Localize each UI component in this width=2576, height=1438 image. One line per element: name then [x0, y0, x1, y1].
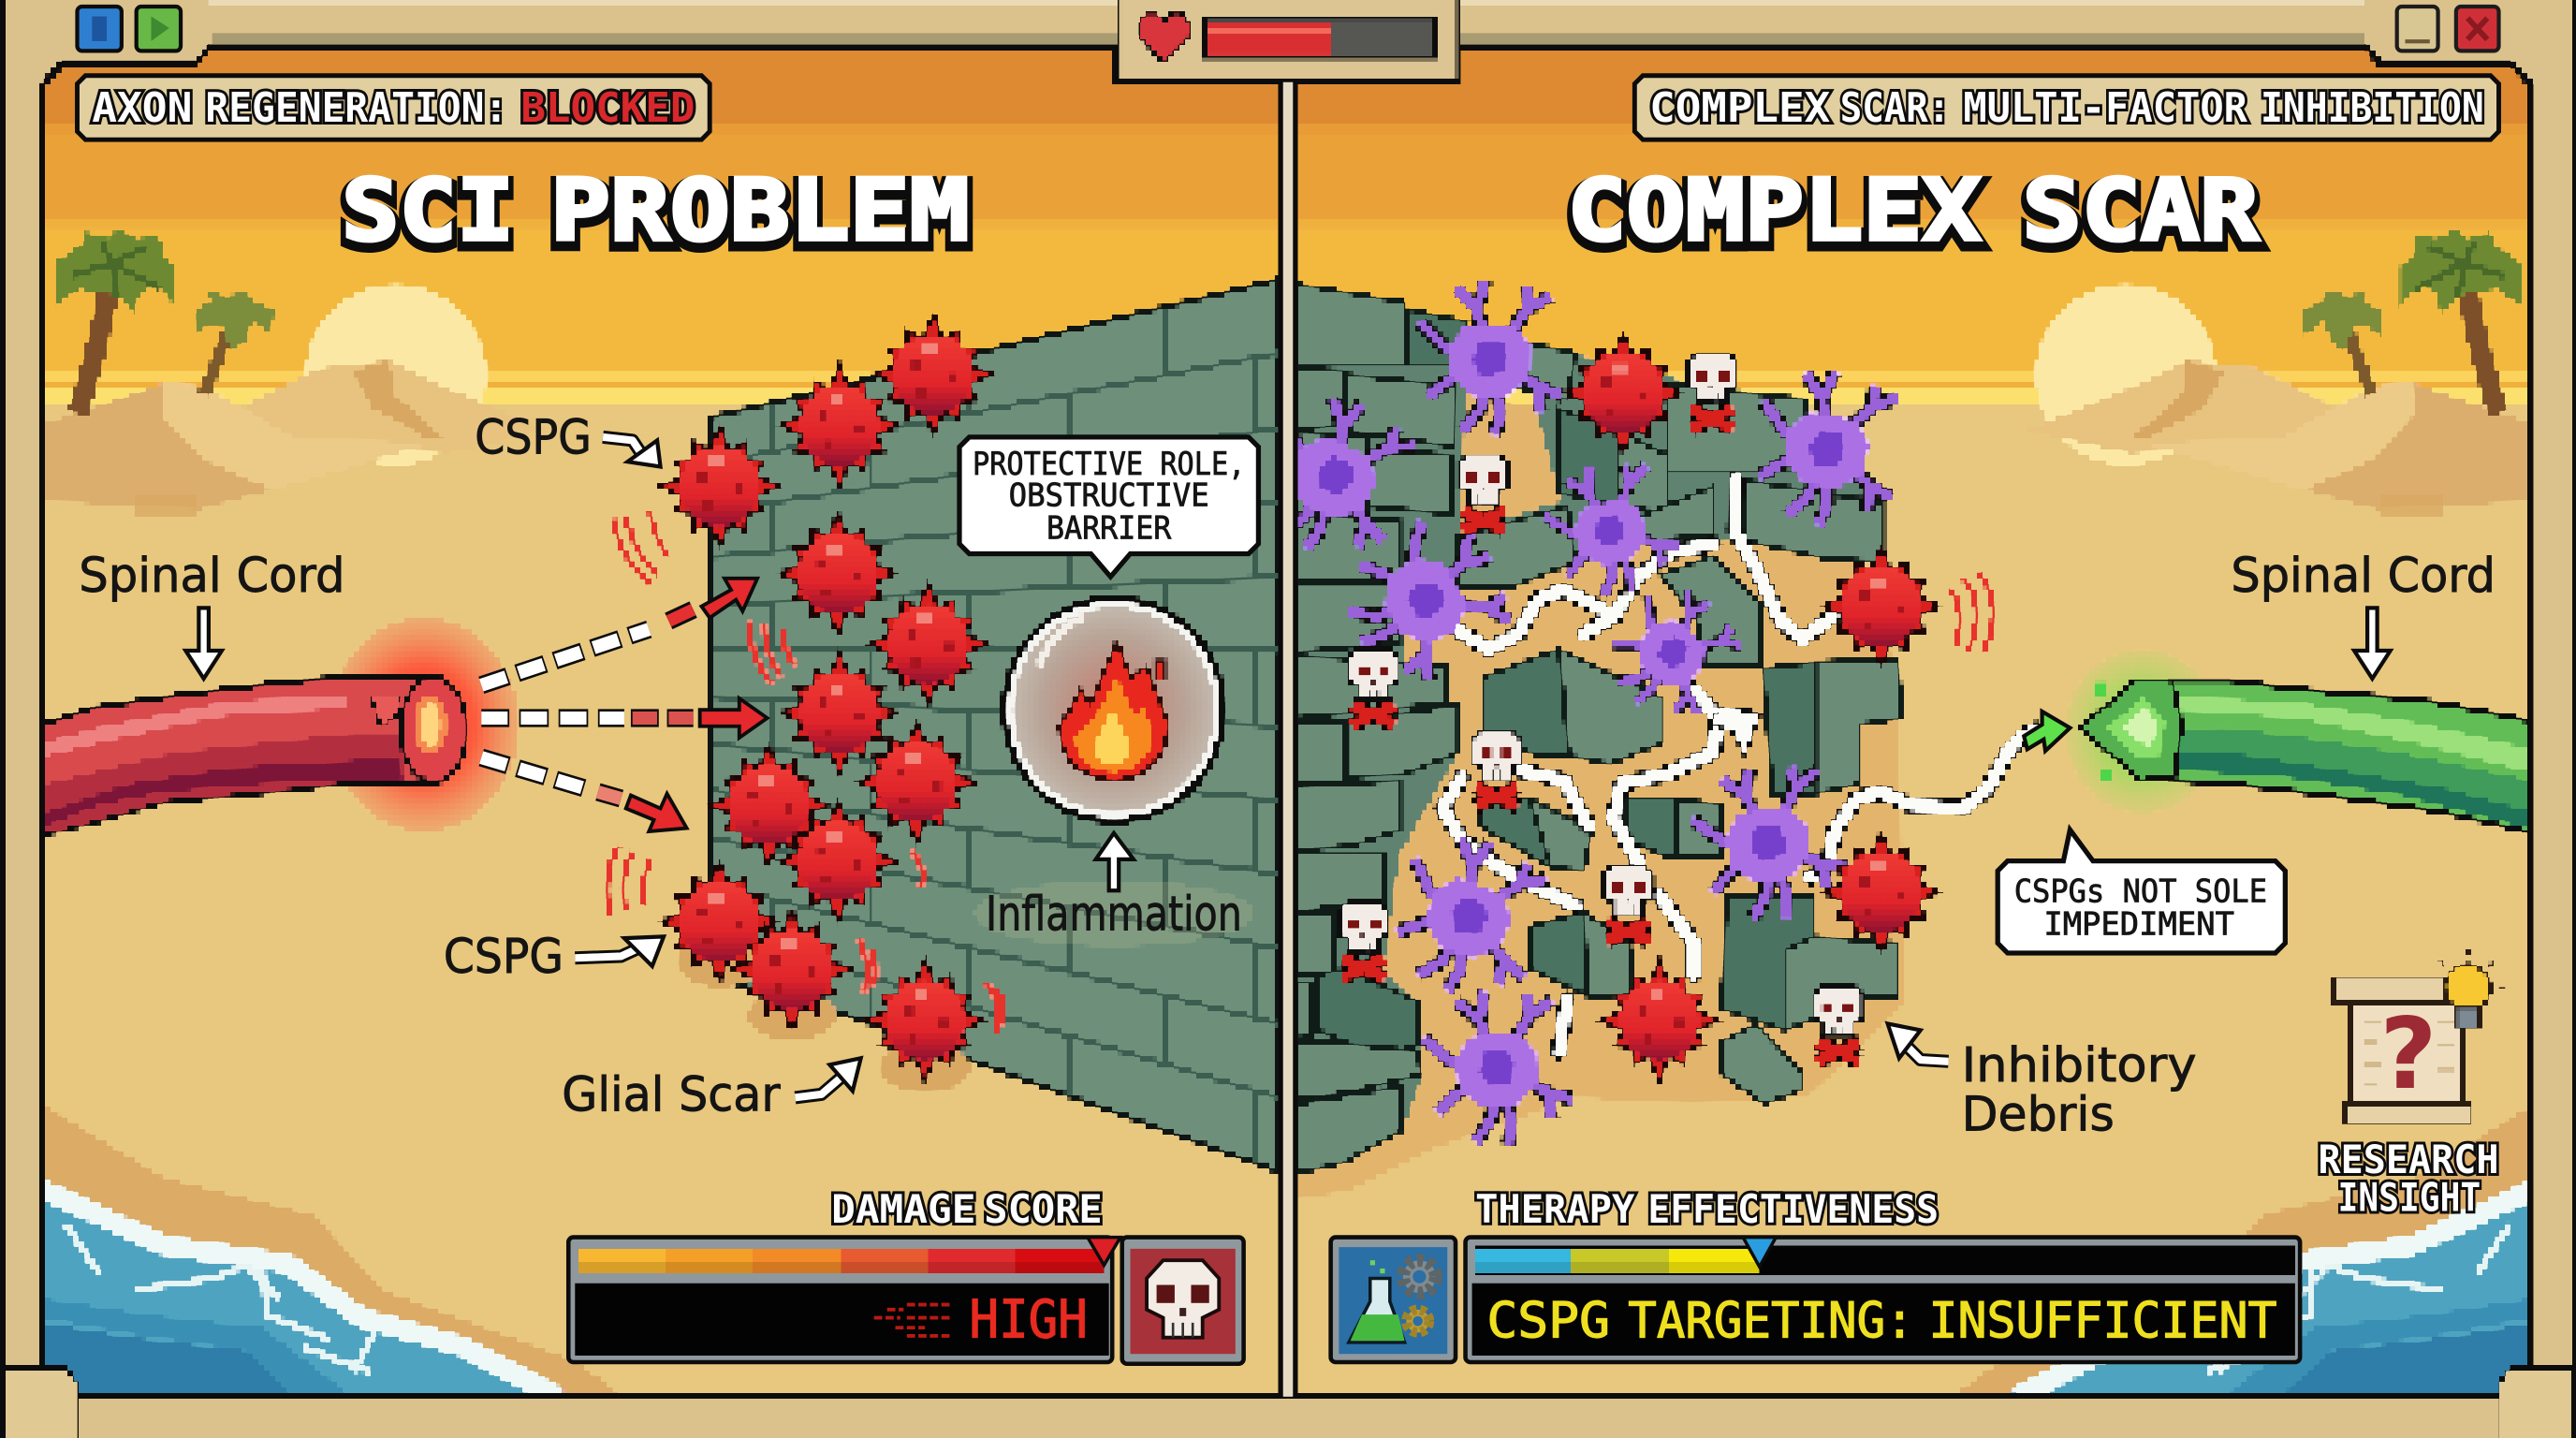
window buttons right [2397, 7, 2499, 51]
label: Inhibitory Debris [1962, 1038, 2197, 1143]
title: COMPLEX SCAR: SCAR [2023, 166, 2259, 266]
astrocyte cells [1297, 281, 1898, 1146]
callout: CSPGs not sole impediment [1998, 829, 2285, 953]
icon: research scroll with bulb [2334, 948, 2507, 1123]
title: SCI PROBLEM: PROBLEM [550, 160, 970, 260]
label: Spinal Cord right: Spinal Cord [2231, 549, 2496, 604]
dunes and palms left [43, 228, 550, 516]
title: SCI PROBLEM: PROBLEM [550, 166, 970, 266]
label: Inhibitory Debris: Debris [1962, 1088, 2115, 1143]
therapy effectiveness HUD [1466, 1186, 2300, 1362]
arrow: Inhibitory Debris [1888, 1023, 1949, 1062]
beach and sea left [43, 1104, 624, 1397]
readout [1472, 1284, 2295, 1356]
therapy effectiveness HUD: TARGETING: [1628, 1293, 1914, 1350]
callout: protective role [959, 437, 1258, 577]
damage score HUD [568, 1186, 1120, 1362]
frame [1466, 1238, 2300, 1362]
label: Spinal Cord left: Spinal Cord [79, 549, 345, 604]
sun left [305, 285, 487, 465]
cord body [43, 677, 439, 835]
label: research insight [2318, 1137, 2499, 1221]
growth cone tip [2080, 681, 2182, 781]
icon: flask and gears box [1331, 1238, 1456, 1362]
badge: complex scar multi-factor inhibition: SCAR: [1840, 84, 1950, 132]
badge: complex scar multi-factor inhibition [1634, 76, 2499, 139]
cord body [2172, 681, 2532, 833]
title: COMPLEX SCAR: COMPLEX [1567, 160, 1982, 260]
title: COMPLEX SCAR: COMPLEX [1567, 166, 1982, 266]
label: EFFECTIVENESS [1647, 1186, 1939, 1232]
title: COMPLEX SCAR [1567, 160, 2259, 266]
badge: complex scar multi-factor inhibition: COMPLEX [1649, 84, 1830, 132]
callout: CSPGs not sole impediment: CSPGs NOT SOLE [2014, 873, 2267, 911]
arrow: Inflammation [1096, 833, 1134, 890]
damage score HUD: HIGH [970, 1290, 1088, 1351]
title: SCI PROBLEM: SCI [342, 160, 514, 260]
arrow: spinal cord left [185, 608, 222, 679]
badge: axon regeneration blocked: BLOCKED [520, 84, 695, 132]
window buttons left [77, 7, 181, 51]
complex scar rubble [1298, 285, 1902, 1177]
ball shadows on the sand [677, 935, 971, 1093]
label: CSPG top: CSPG [475, 410, 592, 465]
bulb [2439, 948, 2507, 1029]
arrow: CSPG bottom [575, 936, 664, 966]
health bar [1204, 18, 1436, 57]
inhibitory debris skulls [1339, 353, 1863, 1062]
arrow: Glial Scar [795, 1058, 861, 1097]
callout: protective role: PROTECTIVE ROLE, [973, 446, 1245, 483]
inflammation bubble with flame [1005, 600, 1222, 820]
scroll [2334, 977, 2471, 1123]
label [831, 1186, 1103, 1232]
title: COMPLEX SCAR: SCAR [2023, 160, 2259, 260]
therapy effectiveness HUD: CSPG [1486, 1293, 1610, 1350]
soft glow behind inflammation label [974, 881, 1253, 946]
meter marker [1088, 1238, 1120, 1265]
meter bar [578, 1249, 1104, 1273]
label: research insight: RESEARCH [2318, 1137, 2499, 1182]
frame [568, 1238, 1112, 1362]
green tip arrow [2024, 712, 2070, 751]
beach and sea right [1952, 1104, 2533, 1397]
label [1475, 1186, 1939, 1232]
label: CSPG bottom: CSPG [444, 930, 564, 985]
callout: CSPGs not sole impediment: IMPEDIMENT [2043, 906, 2234, 944]
icon: skull box [1122, 1238, 1244, 1364]
badge: axon regeneration blocked: REGENERATION: [205, 84, 507, 132]
regenerating spinal cord [2065, 649, 2532, 833]
regenerating axon paths [1442, 479, 2037, 1051]
inhibitory CSPG mines in scar [1564, 332, 1940, 1081]
arrow: CSPG top [603, 437, 661, 466]
question mark on the scroll: ? [2379, 996, 2437, 1111]
title: SCI PROBLEM: SCI [342, 166, 514, 266]
bottom corner blocks [5, 1367, 77, 1438]
failed axon dashes with red arrows [481, 579, 768, 831]
injury glow [329, 618, 520, 831]
torn cord end [401, 677, 466, 782]
damaged spinal cord [43, 618, 520, 835]
label: SCORE [984, 1186, 1103, 1232]
center divider [1278, 82, 1298, 1397]
meter bar [1475, 1245, 2295, 1275]
badge: axon regeneration blocked [77, 76, 710, 139]
sun right [2036, 285, 2217, 465]
badge: complex scar multi-factor inhibition: MULTI-FACTOR [1963, 84, 2248, 132]
label: Glial Scar: Glial Scar [562, 1067, 781, 1123]
badge: complex scar multi-factor inhibition: INHIBITION [2261, 84, 2484, 132]
readout [575, 1284, 1109, 1356]
CSPG cluster on wall [661, 314, 992, 1081]
label: THERAPY [1475, 1186, 1635, 1232]
label: research insight: INSIGHT [2338, 1175, 2481, 1221]
callout: protective role: BARRIER [1046, 510, 1172, 548]
top center status panel [1119, 0, 1459, 81]
callout: protective role: OBSTRUCTIVE [1009, 477, 1209, 515]
green glow [2065, 649, 2219, 814]
label: Inflammation: Inflammation [986, 887, 1242, 942]
arrow: spinal cord right [2354, 608, 2391, 679]
therapy effectiveness HUD: INSUFFICIENT [1928, 1293, 2277, 1350]
title: SCI PROBLEM [342, 160, 970, 266]
darker sand under rubble [1298, 353, 1906, 1199]
dunes and palms right [2026, 228, 2533, 516]
meter marker [1743, 1238, 1776, 1267]
icon: heart [1138, 13, 1190, 63]
flame [1060, 640, 1168, 781]
label: DAMAGE [831, 1186, 976, 1232]
label: Inhibitory Debris: Inhibitory [1962, 1038, 2197, 1093]
badge: axon regeneration blocked: AXON [92, 84, 192, 132]
rubble backing masses [1297, 354, 1863, 1123]
glial scar brick wall [711, 279, 1278, 1175]
red vibration marks left [607, 513, 1994, 1032]
